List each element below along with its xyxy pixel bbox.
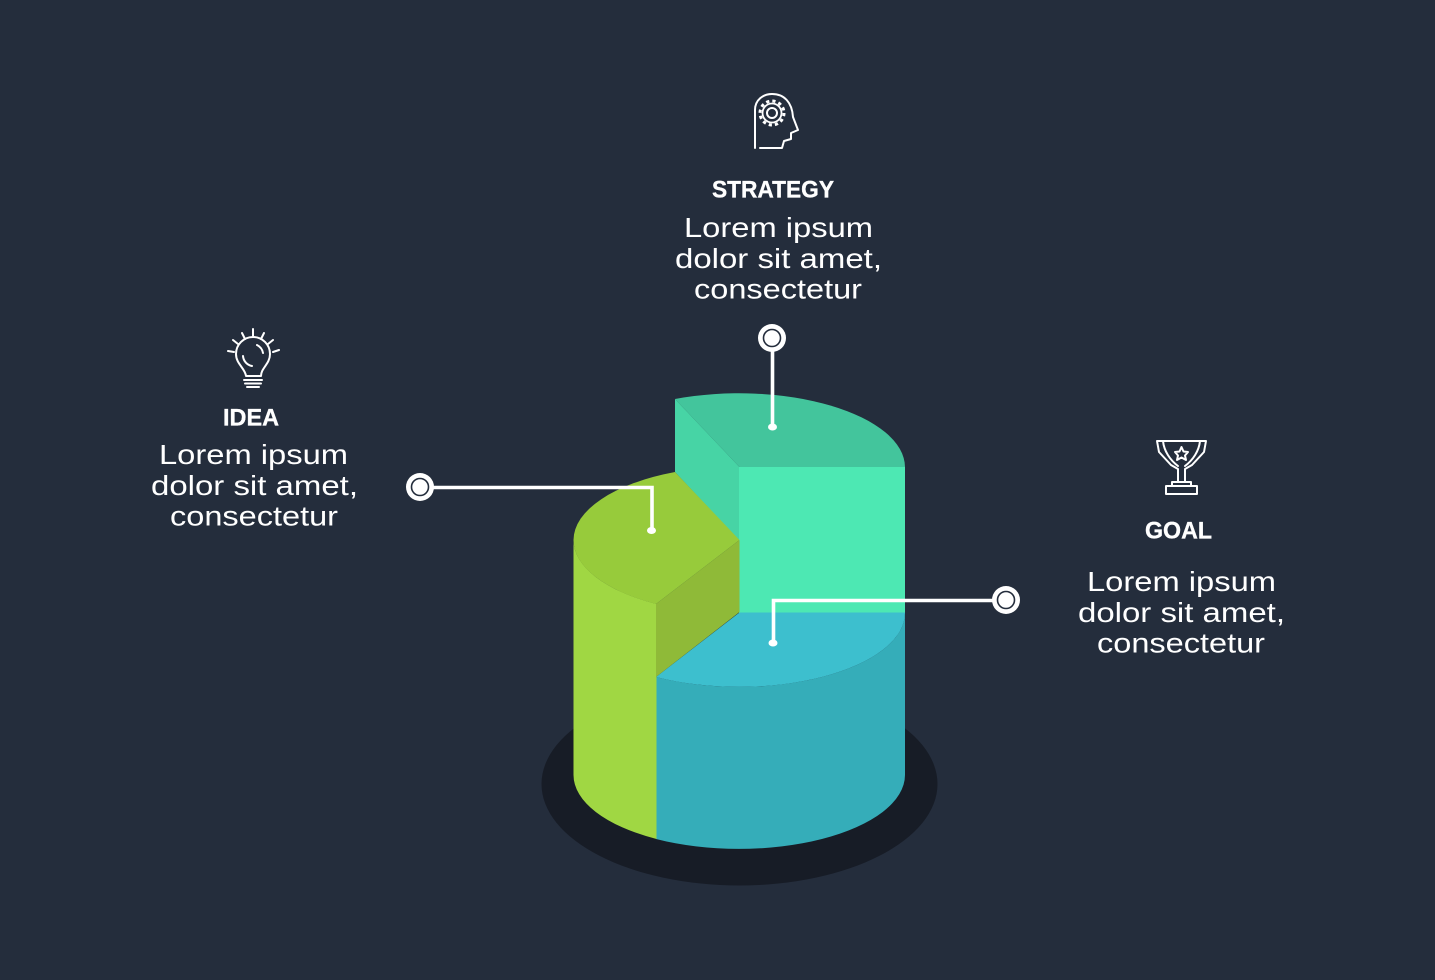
text: strategy description: consectetur: [694, 274, 862, 304]
text: strategy description: Lorem ipsum: [684, 212, 873, 243]
text: goal description: consectetur: [1097, 628, 1265, 658]
text: strategy description: [675, 212, 882, 304]
text: strategy description: dolor sit amet,: [675, 243, 882, 274]
text: idea description: [151, 439, 358, 532]
heading: idea: IDEA: [223, 404, 279, 432]
icon: head with gear: [755, 94, 798, 148]
cylinder chart: [542, 393, 938, 886]
icon: light bulb: [228, 329, 279, 387]
strategy top face: [675, 393, 905, 467]
icon: trophy: [1157, 441, 1206, 494]
idea side face: [574, 540, 656, 839]
strategy front face: [739, 467, 905, 613]
connector: idea: [406, 473, 656, 534]
idea inner face: [656, 540, 740, 677]
idea top face: [574, 472, 740, 604]
text: idea description: consectetur: [170, 500, 338, 532]
goal top face: [656, 612, 905, 687]
text: idea description: dolor sit amet,: [151, 470, 358, 501]
connector: goal: [768, 586, 1020, 646]
heading: strategy: STRATEGY: [712, 176, 834, 204]
text: goal description: [1078, 566, 1285, 658]
heading: goal: GOAL: [1145, 518, 1212, 544]
idea segment: [574, 472, 740, 839]
connector: strategy: [758, 324, 786, 430]
text: idea description: Lorem ipsum: [159, 439, 348, 470]
strategy inner face: [675, 399, 740, 541]
base shadow: [542, 682, 938, 886]
strategy segment: [675, 393, 905, 613]
goal segment: [656, 612, 905, 849]
goal side face: [656, 613, 905, 849]
text: goal description: dolor sit amet,: [1078, 597, 1285, 628]
text: goal description: Lorem ipsum: [1087, 566, 1276, 597]
